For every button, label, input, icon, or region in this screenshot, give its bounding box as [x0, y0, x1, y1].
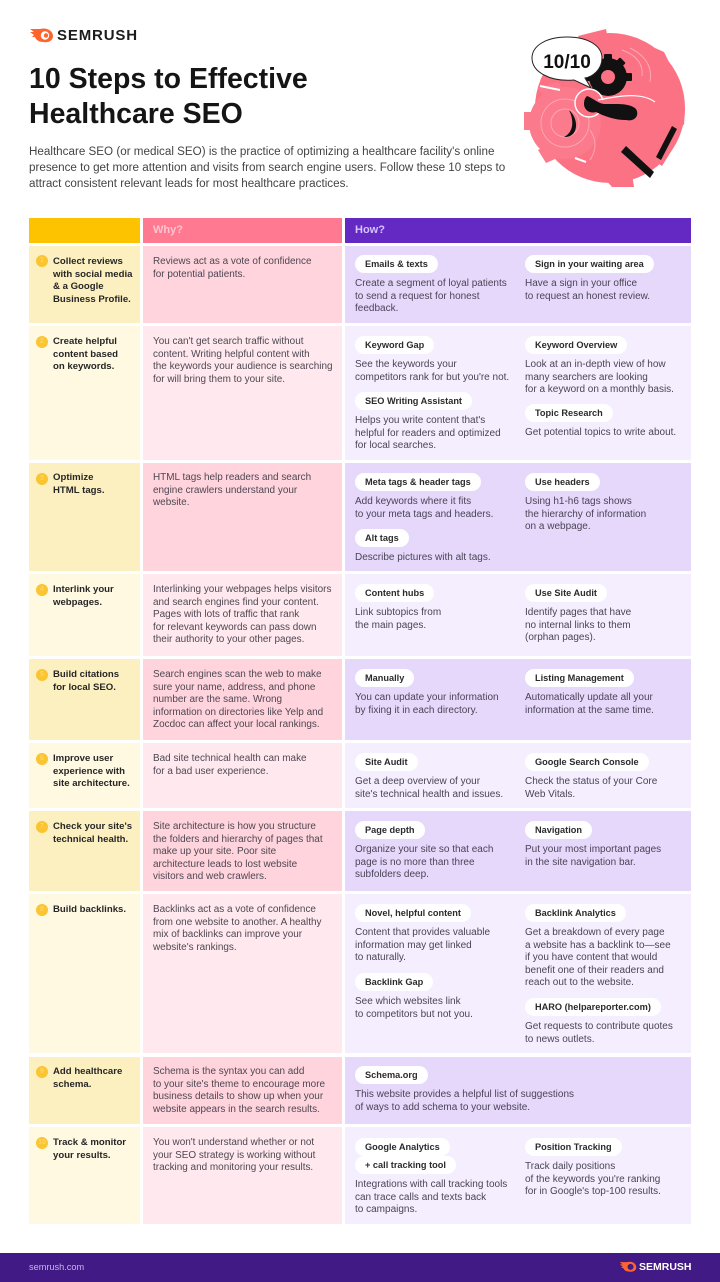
why text: your SEO strategy is working without: [153, 1150, 315, 1160]
tool: content hubs: the main pages.: [355, 620, 426, 630]
tool: SEO writing assistant: SEO Writing Assistant: [365, 396, 462, 406]
tool: google search console: Google Search Console: [535, 757, 639, 767]
step title: [53, 1137, 126, 1162]
tool: sign in waiting area: [525, 255, 654, 302]
step title: Business Profile.: [53, 294, 131, 304]
step title: Interlink your: [53, 584, 114, 595]
why text: You won't understand whether or not: [153, 1137, 314, 1148]
tool: google analytics plus call tracking: can trace calls and texts back: [355, 1192, 486, 1202]
tool: emails and texts: Create a segment of loyal patients: [355, 278, 507, 289]
tool: sign in waiting area: Have a sign in your office: [525, 278, 637, 289]
step number 1: [36, 255, 48, 267]
why text: [153, 669, 323, 730]
tool: keyword overview: Keyword Overview: [535, 340, 617, 350]
tool: backlink analytics: [525, 904, 671, 990]
why text: sure your name, address, and phone: [153, 682, 315, 692]
row 1: reviews: [29, 246, 691, 323]
step title: Build citations: [53, 669, 119, 680]
tool: topic research: [525, 404, 676, 438]
tool: meta tags: Add keywords where it fits: [355, 496, 471, 507]
why text: [153, 904, 322, 954]
why text: [153, 821, 323, 884]
tool: backlink analytics: benefit one of their readers and: [525, 964, 664, 976]
why text: information on directories like Yelp and: [153, 706, 323, 718]
why text: website's rankings.: [153, 942, 237, 952]
why text: [153, 584, 332, 645]
tool: novel helpful content: information may get linked: [355, 940, 472, 950]
step number 5: [36, 669, 48, 681]
tool: manually: Manually: [365, 673, 404, 683]
step number 3: [36, 473, 48, 485]
tool: google search console: Web Vitals.: [525, 788, 575, 800]
tool: backlink gap: See which websites link: [355, 996, 461, 1007]
step title: site architecture.: [53, 778, 130, 789]
tool: backlink gap: to competitors but not you.: [355, 1008, 473, 1020]
tool: keyword overview: [525, 336, 674, 395]
tool: position tracking: Position Tracking: [535, 1142, 612, 1152]
why text: [153, 753, 307, 776]
footer url: semrush.com: [29, 1262, 84, 1272]
step number 2: [36, 336, 48, 348]
tool: meta tags: Meta tags & header tags: [365, 477, 471, 487]
tool: site audit: site's technical health and issues.: [355, 788, 503, 800]
step title: Check your site's: [53, 821, 132, 832]
why text: to your site's theme to encourage more: [153, 1078, 325, 1090]
tool: use headers: the hierarchy of information: [525, 508, 646, 520]
why text: Interlinking your webpages helps visitors: [153, 584, 331, 595]
tool: schema.org: of ways to add schema to your website.: [355, 1102, 530, 1112]
step title: [53, 256, 132, 304]
row 10: track and monitor: [29, 1127, 691, 1224]
step title: on keywords.: [53, 361, 114, 372]
step title: Create helpful: [53, 336, 117, 347]
tool: SEO writing assistant: helpful for readers and optimized: [355, 428, 501, 438]
step title: Add healthcare: [53, 1066, 122, 1077]
step number 7: [36, 821, 48, 833]
step title: [53, 584, 114, 608]
hand: [584, 96, 677, 178]
step number 10: 10: [38, 1139, 46, 1146]
intro text: Healthcare SEO (or medical SEO) is the practice of optimizing a healthcare facility's online: [29, 145, 494, 158]
why text: [153, 1066, 325, 1116]
step title: your results.: [53, 1150, 111, 1160]
tool: listing management: Automatically update all your: [525, 692, 653, 703]
tool: novel helpful content: to naturally.: [355, 952, 406, 963]
why text: You can't get search traffic without: [153, 336, 304, 347]
why text: Search engines scan the web to make: [153, 669, 322, 680]
tool: content hubs: Content hubs: [365, 588, 424, 598]
why text: for potential patients.: [153, 268, 245, 280]
header: how: How?: [355, 224, 385, 236]
tool: meta tags: [355, 473, 493, 520]
why text: HTML tags help readers and search: [153, 472, 311, 483]
why text: architecture leads to lost website: [153, 858, 297, 870]
step number 8: [36, 904, 48, 916]
why text: engine crawlers understand your: [153, 484, 297, 496]
tool: use headers: [525, 473, 646, 532]
why text: for will bring them to your site.: [153, 374, 285, 384]
why text: content. Writing helpful content with: [153, 348, 310, 360]
step number 4: 4: [40, 586, 44, 593]
why text: mix of backlinks can improve your: [153, 929, 302, 940]
step title: [53, 821, 132, 846]
intro text: presence to get more attention and visits from search engine users. Follow these 10 steps to: [29, 161, 505, 174]
tool: manually: by fixing it in each directory.: [355, 704, 478, 716]
tool: manually: [355, 669, 499, 716]
why text: the keywords your audience is searching: [153, 361, 333, 372]
tool: keyword gap: competitors rank for but you're not.: [355, 372, 509, 382]
tool: keyword gap: See the keywords your: [355, 359, 457, 370]
row 3: HTML tags: [29, 463, 691, 571]
tool: meta tags: to your meta tags and headers.: [355, 508, 493, 520]
tool: position tracking: [525, 1138, 661, 1198]
tool: use site audit: Use Site Audit: [535, 588, 597, 598]
why text: [153, 256, 312, 280]
why text: for a bad user experience.: [153, 766, 268, 776]
tool: use headers: Use headers: [535, 477, 590, 487]
intro text: [29, 145, 505, 190]
why text: Bad site technical health can make: [153, 753, 307, 764]
tool: use site audit: [525, 584, 631, 643]
row 9: schema: [29, 1057, 691, 1124]
white gaps between gears: [540, 86, 586, 162]
tool: keyword overview: Look at an in-depth view of how: [525, 359, 666, 370]
tool: manually: You can update your information: [355, 692, 499, 703]
step title: [53, 753, 130, 789]
step title: Collect reviews: [53, 256, 123, 267]
tool: page depth: [355, 821, 493, 882]
header: why: Why?: [153, 224, 183, 236]
tool: alt tags: Alt tags: [365, 533, 399, 543]
tool: backlink analytics: a website has a backlink to—see: [525, 940, 671, 950]
why text: website.: [153, 497, 189, 508]
tool: page depth: page is no more than three: [355, 856, 475, 868]
tool: google analytics plus call tracking: [355, 1138, 507, 1216]
tool: page depth: Organize your site so that each: [355, 844, 493, 855]
tool: keyword overview: many searchers are looking: [525, 372, 648, 382]
knob: [575, 89, 603, 117]
step number 1: 1: [40, 257, 44, 264]
tool: navigation: in the site navigation bar.: [525, 856, 636, 868]
why text: from one website to another. A healthy: [153, 916, 322, 928]
tool: HARO: [525, 998, 673, 1046]
tool: page depth: subfolders deep.: [355, 869, 429, 880]
step number 8: 8: [40, 906, 44, 913]
logo: Semrush header: [30, 27, 138, 44]
step number 4: [36, 584, 48, 596]
tool: listing management: information at the same time.: [525, 704, 654, 716]
why text: and search engines find your content.: [153, 596, 319, 608]
step title: [53, 669, 119, 692]
tool: site audit: Get a deep overview of your: [355, 776, 480, 787]
tool: backlink analytics: reach out to the website.: [525, 977, 634, 988]
step title: [53, 1066, 122, 1091]
tool: novel helpful content: Novel, helpful content: [365, 908, 461, 918]
tool: google analytics plus call tracking: Integrations with call tracking tools: [355, 1179, 507, 1190]
tool: use site audit: Identify pages that have: [525, 607, 631, 618]
step number 9: [36, 1066, 48, 1078]
logo wordmark: SEMRUSH: [57, 27, 138, 44]
step number 7: 7: [40, 823, 44, 830]
tool: novel helpful content: [355, 904, 490, 964]
tool: site audit: [355, 753, 503, 800]
why text: Reviews act as a vote of confidence: [153, 256, 312, 267]
why text: the folders and hierarchy of pages that: [153, 834, 323, 844]
footer: [0, 1253, 720, 1282]
step title: with social media: [53, 268, 132, 280]
step number 5: 5: [40, 671, 44, 678]
tool: listing management: [525, 669, 654, 716]
tool: SEO writing assistant: for local searches.: [355, 440, 436, 451]
step title: [53, 472, 105, 496]
why text: Site architecture is how you structure: [153, 821, 316, 832]
tool: content hubs: Link subtopics from: [355, 607, 441, 618]
tool: google analytics plus call tracking: to campaigns.: [355, 1204, 417, 1215]
tool: google analytics plus call tracking: + call tracking tool: [365, 1160, 446, 1170]
tool: SEO writing assistant: [355, 392, 501, 451]
tool: use headers: Using h1-h6 tags shows: [525, 496, 632, 507]
row 6: site architecture: [29, 743, 691, 808]
tool: use headers: on a webpage.: [525, 521, 591, 532]
header: step column: [29, 218, 140, 243]
step title: Build backlinks.: [53, 904, 126, 915]
tool: keyword gap: Keyword Gap: [365, 340, 424, 350]
step title: HTML tags.: [53, 484, 105, 496]
small pink gear: [524, 82, 601, 163]
intro text: attract consistent relevant leads for most healthcare practices.: [29, 177, 349, 190]
step number 6: [36, 753, 48, 765]
row 8: backlinks: [29, 894, 691, 1053]
step title: webpages.: [53, 596, 102, 608]
tool: schema.org: This website provides a helpful list of suggestions: [355, 1089, 574, 1100]
why text: [153, 336, 333, 384]
step number 3: 3: [40, 475, 44, 482]
why text: [153, 1137, 315, 1174]
why text: [153, 472, 311, 508]
table header: [29, 218, 691, 243]
tool: content hubs: [355, 584, 441, 630]
row 5: citations: [29, 659, 691, 740]
row 2: content: [29, 326, 691, 460]
tool: page depth: Page depth: [365, 825, 415, 835]
moon shape: [564, 110, 576, 137]
step number 10: [36, 1137, 48, 1149]
gear line details: [541, 48, 651, 160]
why text: for relevant keywords can pass down: [153, 622, 316, 632]
why text: number are the same. Wrong: [153, 694, 282, 705]
step title: Improve user: [53, 753, 113, 764]
tool: novel helpful content: Content that provides valuable: [355, 927, 490, 938]
step number 2: 2: [40, 338, 44, 345]
tool: keyword overview: for a keyword on a monthly basis.: [525, 384, 674, 395]
tool: position tracking: of the keywords you're ranking: [525, 1174, 660, 1184]
step title: Optimize: [53, 472, 94, 483]
big pink gear: [535, 29, 685, 187]
why text: Backlinks act as a vote of confidence: [153, 904, 316, 915]
tool: HARO: to news outlets.: [525, 1034, 594, 1044]
step title: for local SEO.: [53, 682, 116, 692]
tool: listing management: Listing Management: [535, 673, 624, 683]
tool: sign in waiting area: Sign in your waiting area: [535, 259, 644, 269]
step title: & a Google: [53, 281, 104, 292]
why text: tracking and monitoring your results.: [153, 1162, 313, 1173]
step title: [53, 336, 118, 372]
step title: Track & monitor: [53, 1137, 126, 1148]
why text: their authority to your other pages.: [153, 634, 304, 645]
tool: backlink analytics: Get a breakdown of every page: [525, 927, 665, 938]
title: [29, 63, 308, 130]
tool: use site audit: no internal links to them: [525, 620, 631, 630]
tool: backlink gap: Backlink Gap: [365, 977, 423, 987]
tool: HARO: Get requests to contribute quotes: [525, 1021, 673, 1032]
tool: sign in waiting area: to request an honest review.: [525, 290, 650, 302]
row 4: interlink: [29, 574, 691, 656]
title: Healthcare SEO: [29, 98, 243, 130]
why text: Pages with lots of traffic that rank: [153, 609, 299, 620]
tool: position tracking: for in Google's top-100 results.: [525, 1186, 661, 1197]
illustration: hand turning gears with 10/10 speech bubble: [524, 29, 685, 187]
step number 9: 9: [40, 1068, 44, 1075]
tool: navigation: Navigation: [535, 825, 582, 835]
tool: alt tags: Describe pictures with alt tags.: [355, 552, 491, 563]
why text: Zocdoc can affect your local rankings.: [153, 719, 320, 730]
icon: flame: [30, 28, 53, 42]
tool: navigation: [525, 821, 661, 869]
tool: google analytics plus call tracking: Google Analytics: [365, 1142, 440, 1152]
bubble text: 10/10: [543, 52, 591, 73]
tool: backlink gap: [355, 973, 473, 1021]
tool: emails and texts: [355, 255, 507, 314]
why text: website appears in the search results.: [153, 1104, 320, 1114]
step title: schema.: [53, 1078, 91, 1090]
tool: backlink analytics: if you have content that would: [525, 952, 657, 963]
tool: backlink analytics: Backlink Analytics: [535, 908, 616, 918]
why text: business details to show up when your: [153, 1091, 323, 1102]
tool: use site audit: (orphan pages).: [525, 632, 596, 643]
why text: make up your site. Poor site: [153, 846, 276, 857]
tool: site audit: Site Audit: [365, 757, 408, 767]
tool: schema.org: [355, 1066, 574, 1114]
tool: google search console: Check the status of your Core: [525, 776, 657, 787]
header: how: [345, 218, 691, 243]
step title: content based: [53, 348, 118, 360]
tool: position tracking: Track daily positions: [525, 1161, 615, 1172]
why text: visitors and web crawlers.: [153, 871, 267, 882]
tool: alt tags: [355, 529, 491, 563]
footer logo: SEMRUSH: [639, 1261, 692, 1273]
tool: google search console: [525, 753, 657, 800]
header: why: [143, 218, 342, 243]
footer logo: [619, 1260, 692, 1274]
tool: schema.org: Schema.org: [365, 1070, 418, 1080]
tool: topic research: Topic Research: [535, 408, 603, 418]
tool: SEO writing assistant: Helps you write content that's: [355, 415, 485, 426]
why text: Schema is the syntax you can add: [153, 1066, 304, 1077]
tool: navigation: Put your most important pages: [525, 844, 661, 855]
tool: keyword gap: [355, 336, 509, 382]
speech bubble: [532, 37, 602, 88]
step title: technical health.: [53, 834, 128, 844]
tool: topic research: Get potential topics to write about.: [525, 427, 676, 438]
tool: HARO: HARO (helpareporter.com): [535, 1002, 651, 1012]
tool: emails and texts: feedback.: [355, 303, 398, 314]
tool: emails and texts: to send a request for honest: [355, 290, 480, 302]
tool: emails and texts: Emails & texts: [365, 259, 428, 269]
step title: experience with: [53, 766, 125, 776]
title: 10 Steps to Effective: [29, 63, 308, 95]
row 7: technical health: [29, 811, 691, 891]
black gear: [586, 54, 632, 97]
step number 6: 6: [40, 755, 44, 762]
